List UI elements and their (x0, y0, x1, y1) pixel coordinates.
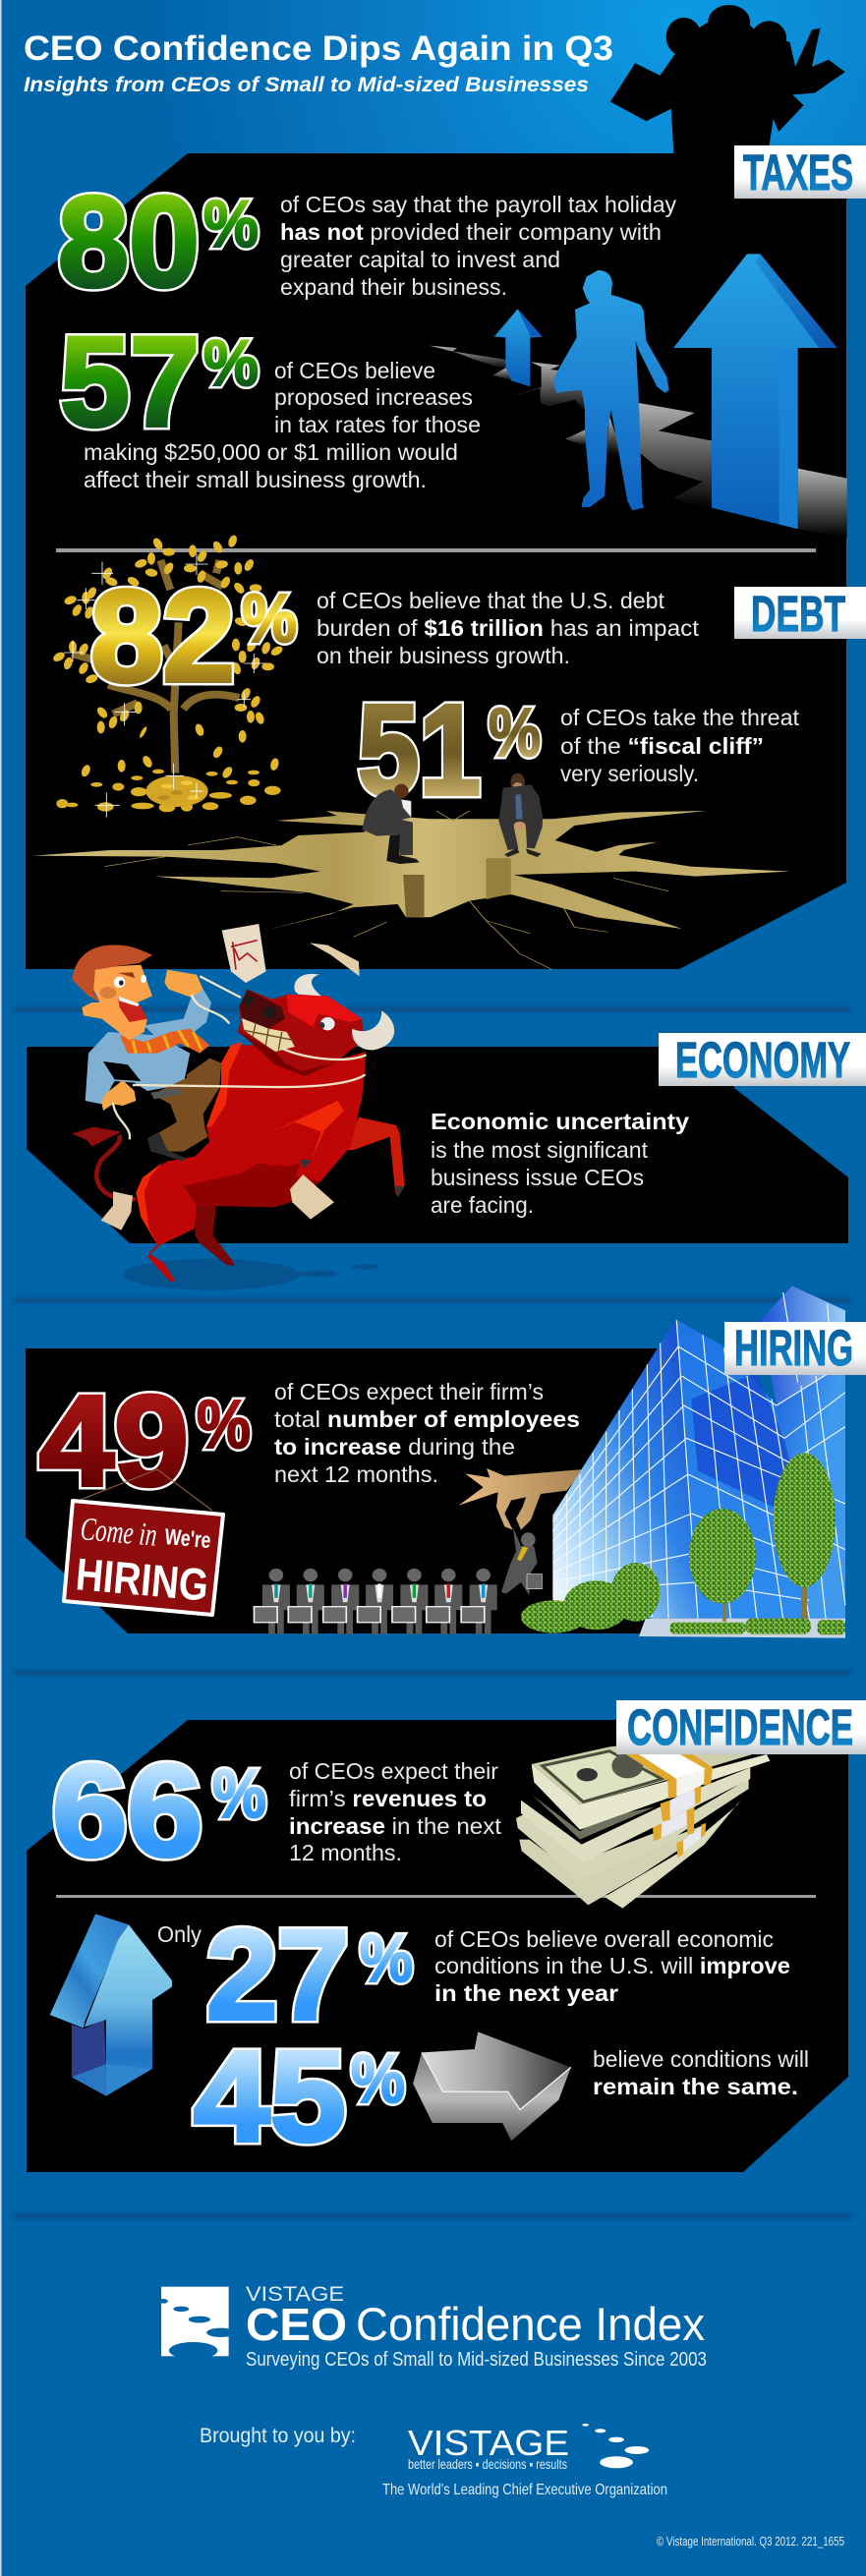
icon: money tree (52, 534, 284, 818)
text: employees to increase: total number of employees (274, 1406, 580, 1432)
text: tax rate increases: of CEOs believe (274, 358, 435, 383)
text: fiscal cliff: of the “fiscal cliff” (560, 733, 764, 759)
illustration: glass office building (552, 1286, 845, 1619)
text: conditions will improve: in the next year (434, 1980, 618, 2006)
stat: 49 percent (39, 1368, 251, 1513)
panel: taxes and debt (26, 144, 866, 970)
stat: 57 percent: % (203, 326, 259, 399)
icon: large blue arrow (673, 254, 837, 529)
icon: blue up arrow (50, 1914, 172, 2096)
text: economic uncertainty: are facing. (431, 1192, 534, 1218)
text: payroll tax holiday: expand their business. (280, 274, 507, 300)
text: conditions will improve: of CEOs believe overall economic (434, 1926, 774, 1952)
stat: 57 percent: % (203, 326, 259, 399)
stat: 80 percent: % (203, 187, 259, 261)
icon: hiring sign (64, 1469, 223, 1615)
black panel shape (26, 1348, 845, 1633)
figure: businessman head in hands (362, 784, 420, 864)
text: tagline: The World's Leading Chief Executive Organization (382, 2482, 667, 2498)
footer: Vistage logo (408, 2423, 649, 2472)
panel: confidence (27, 1699, 866, 2172)
header gradient band (0, 0, 866, 153)
subtitle: Insights from CEOs of Small to Mid-sized Businesses (24, 74, 589, 96)
black panel shape (27, 1720, 848, 2172)
stat: 27 percent: % (360, 1921, 413, 1996)
illustration: row of job candidates (254, 1569, 497, 1634)
stat: 82 percent: % (242, 580, 297, 657)
footer: CEO Confidence Index logo: Confidence Index (356, 2298, 705, 2350)
footer: CEO Confidence Index logo: CEO (246, 2299, 347, 2350)
text: fiscal cliff (560, 705, 800, 786)
text: conditions remain the same (593, 2046, 809, 2099)
stat: 80 percent: % (203, 187, 259, 261)
title: CEO Confidence Dips Again in Q3 (24, 29, 613, 68)
text: economic uncertainty: business issue CEOs (431, 1165, 644, 1190)
panel: economy (27, 924, 866, 1290)
icon: man with empty pockets (553, 270, 669, 510)
illustration: fiscal cliff ground crack (33, 811, 790, 970)
text: only: Only (157, 1921, 202, 1947)
stat: 57 percent: 57 (60, 310, 200, 453)
black panel shape (26, 153, 846, 969)
footer: CEO Confidence Index logo: VISTAGE (246, 2283, 344, 2306)
stat: 51 percent: % (489, 694, 541, 771)
stat: 82 percent: 82 (90, 564, 235, 710)
stat: 27 percent: % (360, 1921, 413, 1996)
stat: 66 percent: 66 (52, 1739, 202, 1884)
text: payroll tax holiday: of CEOs say that the payroll tax holiday (280, 192, 676, 217)
text: employees to increase: next 12 months. (274, 1461, 438, 1487)
stat: 45 percent (194, 2024, 405, 2168)
panel: hiring (26, 1286, 866, 1638)
stat: 51 percent: % (489, 694, 541, 771)
text: revenues to increase: firm’s revenues to (289, 1786, 487, 1811)
text: conditions remain the same: remain the same. (593, 2074, 798, 2099)
text: payroll tax holiday (280, 192, 676, 300)
text: employees to increase: of CEOs expect their firm’s (274, 1379, 544, 1404)
stat: 51 percent: 51 (358, 677, 481, 822)
stat: 49 percent: % (197, 1386, 251, 1462)
icon: hiring sign: We're (164, 1523, 212, 1553)
text: conditions will improve: conditions in the U.S. will improve (434, 1953, 790, 1978)
footer: CEO Confidence Index logo (159, 2283, 707, 2371)
text: revenues to increase: increase in the next (289, 1813, 502, 1839)
stat: 49 percent: 49 (39, 1368, 189, 1513)
stat: 45 percent: 45 (194, 2024, 346, 2168)
stat: 57 percent: 57 (60, 310, 200, 453)
black panel shape (27, 1047, 848, 1243)
text: fiscal cliff: of CEOs take the threat (560, 705, 800, 730)
text: economic uncertainty: is the most significant (431, 1137, 649, 1163)
icon: hiring sign: HIRING (74, 1548, 210, 1611)
logo mark (159, 2287, 235, 2359)
text: tax rate increases: proposed increases (274, 384, 473, 410)
text: tax rate increases: in tax rates for those (274, 412, 481, 437)
footer: Vistage logo: better leaders ▪ decisions ▪ results (408, 2456, 567, 2472)
icon: stacks of dollar bills (516, 1746, 770, 1909)
text: conditions remain the same: believe conditions will (593, 2046, 809, 2072)
stat: 80 percent: 80 (58, 169, 200, 314)
text: brought to you by: Brought to you by: (200, 2425, 356, 2447)
stat: 45 percent: % (351, 2040, 405, 2117)
stat: 45 percent: 45 (194, 2024, 346, 2168)
stat: 80 percent: 80 (58, 169, 200, 314)
stat: 51 percent: 51 (358, 677, 481, 822)
footer: Vistage logo: VISTAGE (408, 2423, 569, 2463)
stat: 27 percent: 27 (206, 1903, 349, 2046)
illustration: businessman riding red bull (72, 924, 405, 1290)
stat: 66 percent: % (212, 1755, 266, 1832)
executive silhouettes (610, 5, 845, 154)
text: payroll tax holiday: has not provided their company with (280, 219, 662, 245)
left edge highlight (0, 0, 2, 2576)
text: debt burden: burden of $16 trillion has an impact (317, 615, 700, 641)
stat: 66 percent (52, 1739, 266, 1884)
text: revenues to increase: 12 months. (289, 1840, 402, 1865)
text: economic uncertainty (431, 1109, 689, 1218)
footer: CEO Confidence Index logo: Surveying CEOs of Small to Mid-sized Businesses Since 2003 (246, 2349, 707, 2371)
text: payroll tax holiday: greater capital to invest and (280, 247, 560, 272)
stat: 49 percent: % (197, 1386, 251, 1462)
text: debt burden: on their business growth. (317, 643, 570, 668)
crack in ground (430, 346, 847, 538)
text: conditions will improve (434, 1926, 790, 2006)
stat: 49 percent: 49 (39, 1368, 189, 1513)
text: tax rate increases: making $250,000 or $1 million would (84, 439, 458, 465)
text: revenues to increase (289, 1758, 502, 1865)
text: tax rate increases (84, 358, 481, 492)
icon: small blue arrow (494, 309, 543, 386)
icon: hiring sign: Come in (79, 1512, 158, 1554)
illustration: trees and shrubs (521, 1453, 845, 1638)
text: employees to increase (274, 1379, 580, 1487)
text: fiscal cliff: very seriously. (560, 761, 699, 786)
stat: 66 percent: % (212, 1755, 266, 1832)
stat: 27 percent: 27 (206, 1903, 349, 2046)
text: revenues to increase: of CEOs expect their (289, 1758, 498, 1784)
stat: 82 percent: 82 (90, 564, 235, 710)
stat: 66 percent: 66 (52, 1739, 202, 1884)
text: debt burden: of CEOs believe that the U.S. debt (317, 588, 665, 613)
icon: gray right arrow (413, 2032, 571, 2141)
figure: businessman head bowed (498, 773, 543, 857)
stat: 45 percent: % (351, 2040, 405, 2117)
text: economic uncertainty: Economic uncertainty (431, 1109, 689, 1134)
text: debt burden (317, 588, 700, 668)
text: employees to increase: to increase during the (274, 1434, 515, 1460)
stat: 82 percent: % (242, 580, 297, 657)
illustration: hand plucking a candidate (459, 1468, 583, 1595)
text: tax rate increases: affect their small business growth. (84, 467, 427, 492)
stat: 27 percent (206, 1903, 413, 2046)
